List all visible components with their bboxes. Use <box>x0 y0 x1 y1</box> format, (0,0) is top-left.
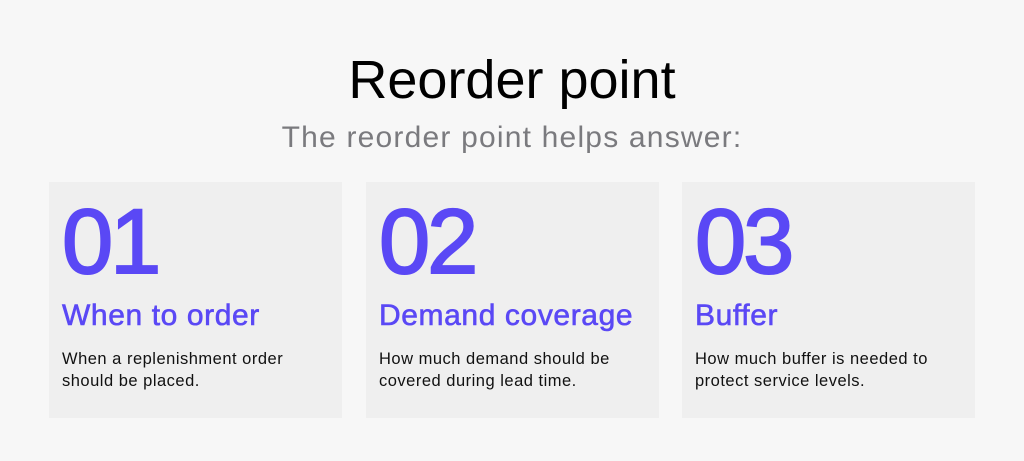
heading: When to order <box>62 299 260 332</box>
subtitle: The reorder point helps answer: <box>282 121 742 154</box>
title: Reorder point <box>348 50 676 110</box>
body text: How much buffer is needed to <box>695 350 928 368</box>
body text: covered during lead time. <box>379 372 577 390</box>
heading: Demand coverage <box>379 299 633 332</box>
panel: when to order <box>49 182 342 418</box>
body text: When a replenishment order <box>62 350 283 368</box>
body text: protect service levels. <box>695 372 865 390</box>
body text <box>62 350 283 390</box>
body text: How much demand should be <box>379 350 610 368</box>
panel: buffer <box>682 182 975 418</box>
heading: Buffer <box>695 299 778 332</box>
body text <box>379 350 610 390</box>
body text: should be placed. <box>62 372 200 390</box>
panel: demand coverage <box>366 182 659 418</box>
number 02: 02 <box>379 191 475 293</box>
number 03: 03 <box>695 191 791 293</box>
body text <box>695 350 928 390</box>
number 01: 01 <box>62 191 158 293</box>
